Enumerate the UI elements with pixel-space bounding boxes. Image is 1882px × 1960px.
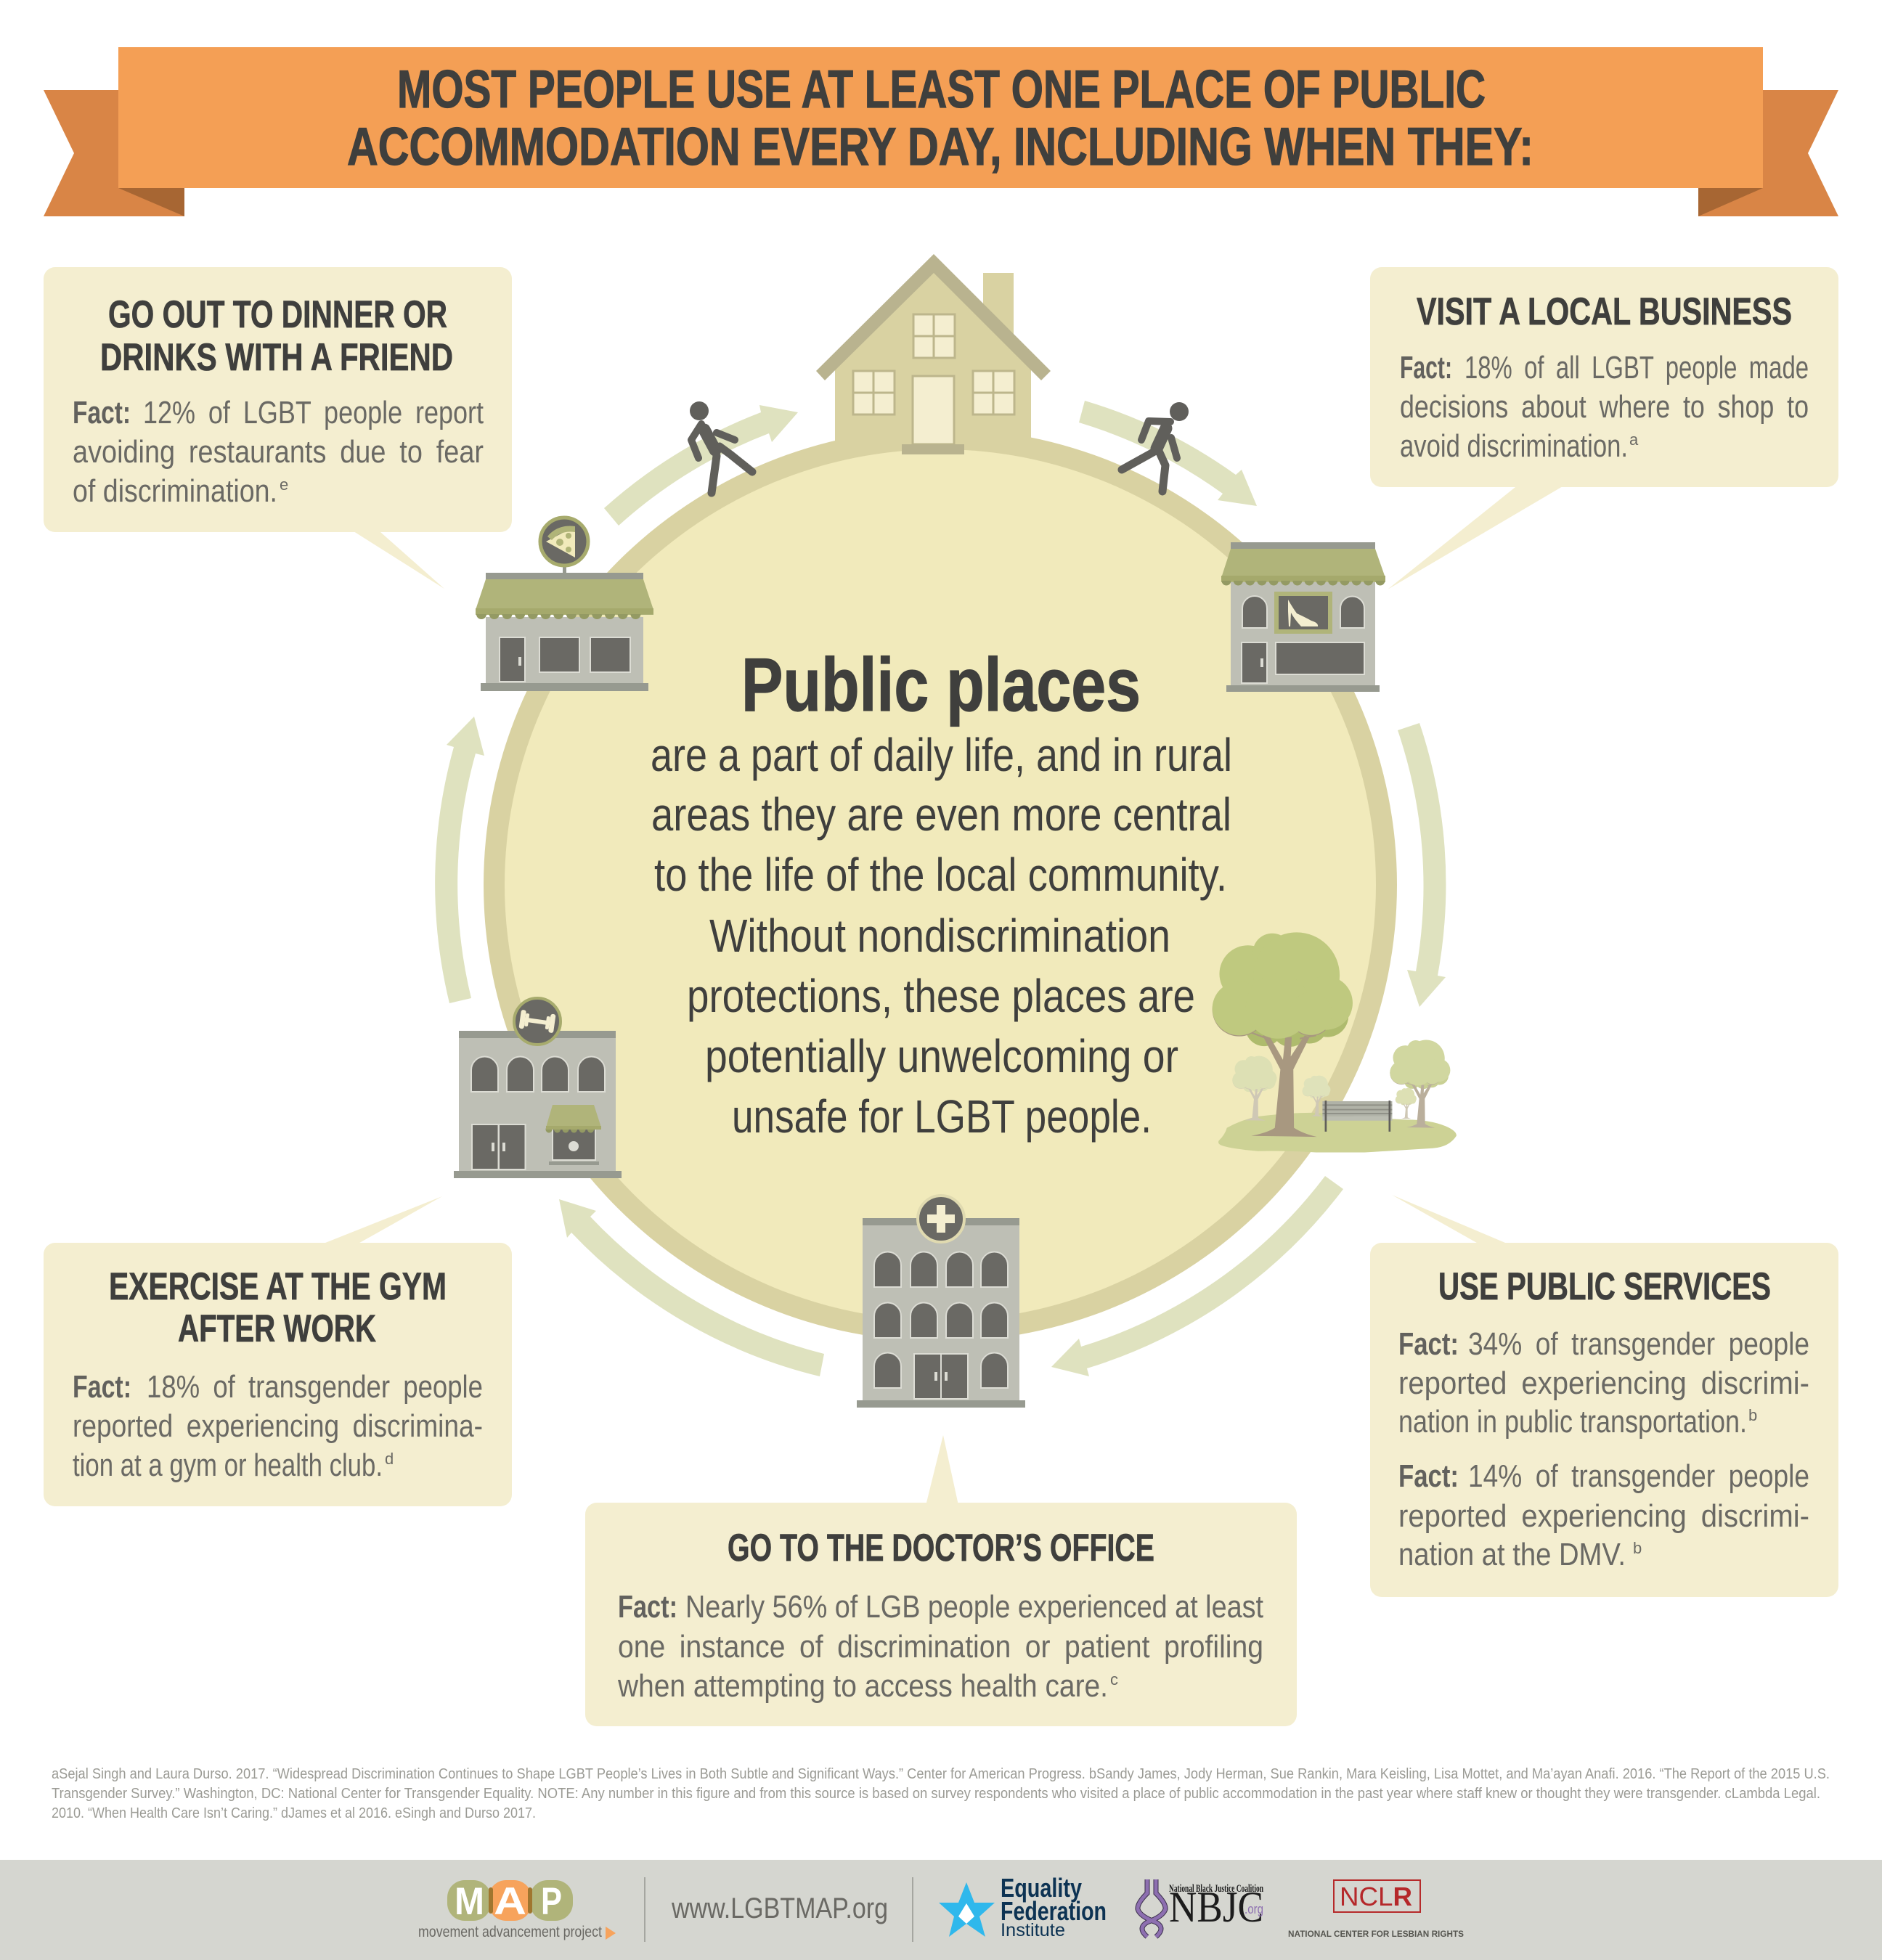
central paragraph: to the life of the local community. [654, 849, 1227, 901]
panel: doctor's office [585, 1435, 1297, 1726]
logo: NBJC: .org [1245, 1902, 1263, 1916]
heading: public places: Public places [741, 643, 1141, 727]
panel: dinner or drinks: DRINKS WITH A FRIEND [100, 336, 453, 379]
title banner: ACCOMMODATION EVERY DAY, INCLUDING WHEN THEY: [347, 118, 1533, 176]
panel: doctor's office: one instance of discrimination or patient profiling [618, 1629, 1263, 1665]
logo: NBJC: NBJC [1169, 1883, 1263, 1931]
panel: dinner or drinks: avoiding restaurants due to fear [73, 434, 484, 470]
panel: gym: Fact: [73, 1369, 131, 1405]
footer band [0, 1860, 1882, 1960]
central paragraph: are a part of daily life, and in rural [651, 729, 1232, 781]
panel: dinner or drinks: Fact: [73, 395, 131, 430]
panel: public services: Fact: [1398, 1326, 1459, 1362]
panel: dinner or drinks: 12% of LGBT people report [143, 395, 484, 430]
icon: walker left [690, 401, 752, 493]
panel: gym: AFTER WORK [178, 1307, 376, 1350]
logo: NBJC [1138, 1879, 1263, 1937]
panel: dinner or drinks: GO OUT TO DINNER OR [108, 293, 447, 336]
panel: public services: 34% of transgender people [1468, 1326, 1809, 1362]
panel: public services: nation at the DMV. [1398, 1537, 1626, 1572]
central circle [484, 261, 1397, 1342]
footnotes [52, 1766, 1830, 1821]
footnotes: 2010. “When Health Care Isn’t Caring.” dJames et al 2016. eSingh and Durso 2017. [52, 1805, 536, 1821]
panel: gym: 18% of transgender people [147, 1369, 483, 1405]
icon: pizza restaurant [476, 518, 653, 691]
panel: public services: reported experiencing discrimi- [1398, 1498, 1809, 1534]
panel: gym: EXERCISE AT THE GYM [109, 1265, 447, 1308]
logo: NCLR: NCLR [1340, 1882, 1412, 1911]
central paragraph: unsafe for LGBT people. [732, 1090, 1152, 1143]
title banner: MOST PEOPLE USE AT LEAST ONE PLACE OF PUBLIC [397, 60, 1486, 119]
panel: doctor's office: c [1110, 1670, 1118, 1689]
logo: MAP [418, 1880, 616, 1940]
logo: NCLR: NATIONAL CENTER FOR LESBIAN RIGHTS [1288, 1929, 1464, 1939]
cycle arrows [435, 401, 1446, 1376]
panel: gym: tion at a gym or health club. [73, 1447, 383, 1483]
logo: MAP: movement advancement project [418, 1924, 602, 1940]
panel: doctor's office: Fact: [618, 1589, 677, 1625]
logo: NCLR [1288, 1880, 1464, 1939]
central paragraph: potentially unwelcoming or [705, 1030, 1178, 1082]
panel: local business: avoid discrimination. [1400, 428, 1628, 464]
logo: Equality Federation Institute: Equality [1001, 1873, 1082, 1903]
panel: public services [1370, 1195, 1838, 1597]
website address: www.LGBTMAP.org [671, 1892, 888, 1924]
logo: Equality Federation Institute: Institute [1001, 1920, 1065, 1940]
panel: gym: d [385, 1450, 394, 1468]
central paragraph: Without nondiscrimination [709, 910, 1170, 962]
panel: local business: Fact: [1400, 350, 1452, 385]
panel: dinner or drinks: e [280, 475, 288, 494]
panel: dinner or drinks [44, 267, 512, 589]
panel: public services: 14% of transgender people [1468, 1458, 1809, 1494]
icon: gym building [454, 998, 622, 1178]
panel: public services: b [1633, 1539, 1642, 1557]
icon: walker right [1122, 402, 1189, 491]
panel: public services: USE PUBLIC SERVICES [1438, 1265, 1771, 1308]
logo: NBJC: National Black Justice Coalition [1169, 1883, 1263, 1895]
panel: dinner or drinks: of discrimination. [73, 473, 277, 509]
logo: Equality Federation Institute [939, 1873, 1107, 1940]
logo: MAP: M [455, 1880, 484, 1923]
central message [651, 643, 1232, 1143]
panel: gym: reported experiencing discrimina- [73, 1408, 483, 1444]
panel: local business [1370, 267, 1838, 589]
panel: doctor's office: Nearly 56% of LGB people experienced at least [685, 1589, 1263, 1625]
central paragraph: protections, these places are [687, 970, 1195, 1022]
icon: house [816, 254, 1051, 454]
panel: doctor's office: GO TO THE DOCTOR’S OFFICE [728, 1527, 1154, 1569]
panel: local business: a [1629, 430, 1639, 449]
icon: hospital [857, 1196, 1025, 1408]
central paragraph [651, 729, 1232, 1143]
panel: public services: reported experiencing discrimi- [1398, 1365, 1809, 1401]
panel: public services: nation in public transportation. [1398, 1404, 1747, 1440]
panel: public services: Fact: [1398, 1458, 1459, 1494]
title banner [44, 47, 1838, 216]
logo: MAP: A [494, 1880, 526, 1923]
central paragraph: areas they are even more central [651, 788, 1231, 841]
icon: shoe store [1221, 542, 1385, 692]
logo: Equality Federation Institute: Federation [1001, 1896, 1107, 1926]
logo: MAP: P [541, 1880, 562, 1923]
panel: public services: b [1748, 1406, 1757, 1424]
panel: gym [44, 1196, 512, 1506]
panel: doctor's office: when attempting to access health care. [617, 1668, 1108, 1704]
icon: park [1213, 932, 1457, 1153]
